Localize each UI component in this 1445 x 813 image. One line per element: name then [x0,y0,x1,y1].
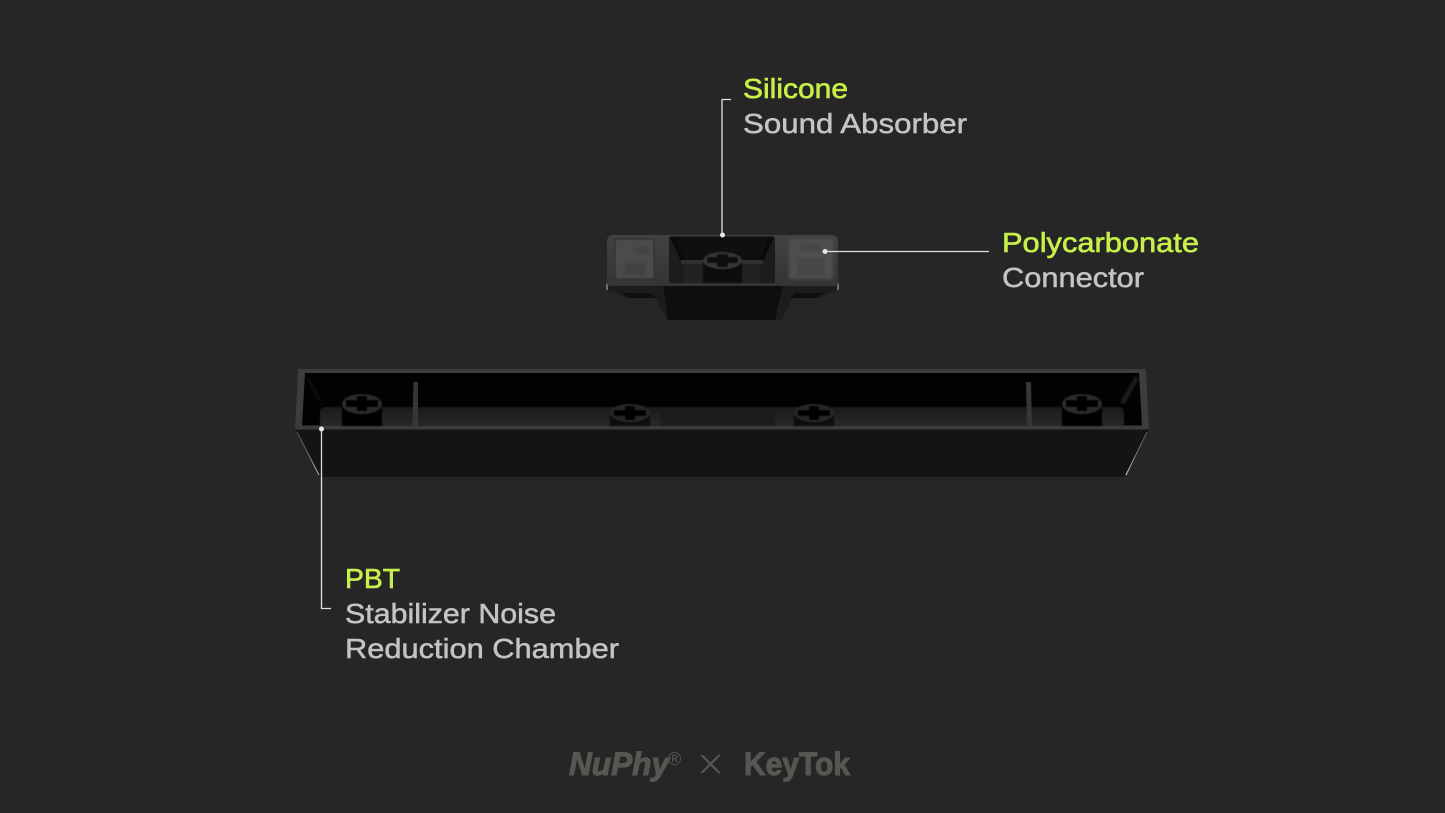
brand logos [569,746,850,782]
label: PBT [345,563,619,664]
housing lower rail [295,426,1149,430]
connector cross stem [703,252,742,283]
label: polycarbonate: Connector [1002,262,1144,293]
leader line: silicone [720,100,731,238]
screw post 2 [610,404,650,426]
logo: NuPhy: NuPhy [569,746,671,782]
label: PBT: Stabilizer Noise [345,598,556,629]
label: silicone: Sound Absorber [743,108,967,139]
housing edge highlights [297,432,1147,475]
housing rim [295,369,1149,429]
connector part [607,235,838,320]
connector translucent polycarbonate body [607,235,838,286]
label: PBT: Reduction Chamber [345,633,619,664]
label: polycarbonate: Polycarbonate [1002,227,1199,258]
leader line: polycarbonate [822,249,989,254]
cross symbol [702,755,720,773]
label: silicone: Silicone [743,73,848,104]
housing inner corner walls [306,375,1138,405]
label: PBT: PBT [345,563,400,594]
leader line: PBT [319,426,331,608]
right translucent clip [789,239,833,279]
connector centre recess [669,236,775,283]
long stabilizer housing [295,369,1149,477]
connector lower body [607,283,838,320]
left translucent clip [615,239,654,279]
label: silicone [743,73,967,139]
screw post 4 [1062,394,1102,426]
screw post 1 [342,394,382,426]
registered mark: ® [668,749,681,769]
housing interior [302,373,1142,426]
logo: KeyTok: KeyTok [744,746,850,782]
screw post 3 [794,404,834,426]
label: polycarbonate [1002,227,1199,293]
housing ribs [412,382,1032,426]
housing floor [320,407,1124,426]
housing front face [295,429,1149,477]
